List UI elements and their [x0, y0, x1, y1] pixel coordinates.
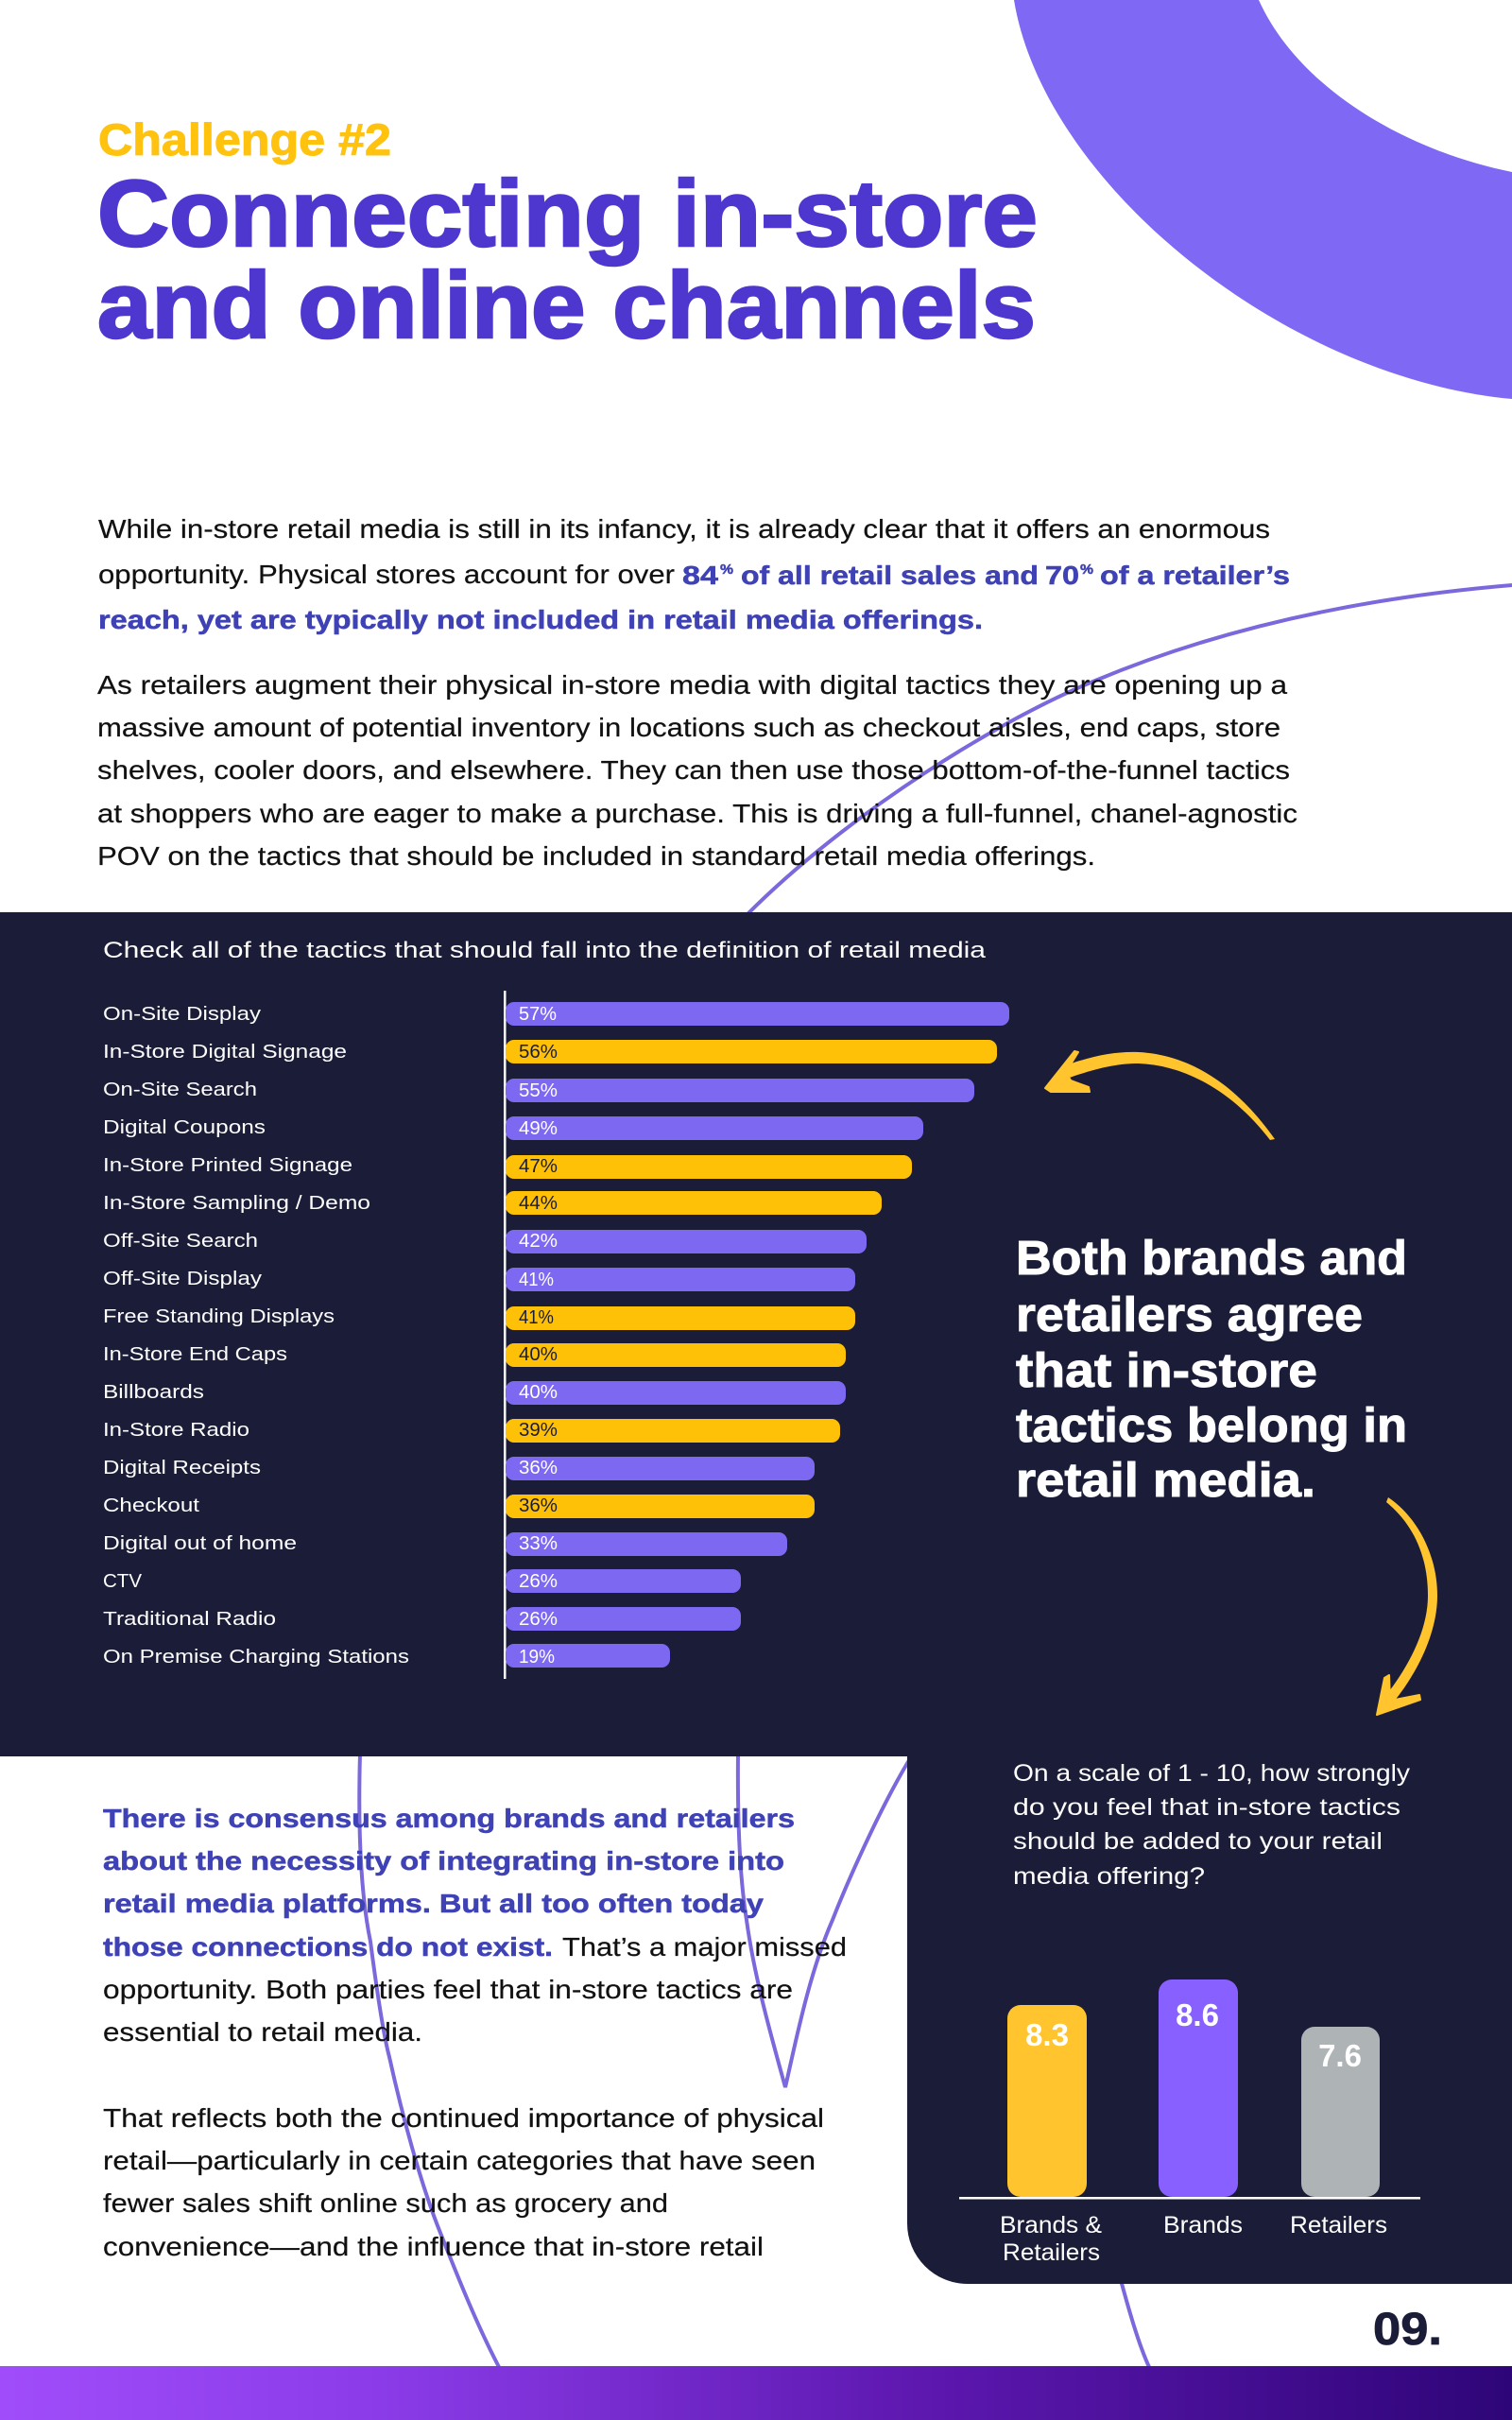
- text block: consensus: about the necessity of integrating in-store into: [103, 1846, 784, 1876]
- intro paragraph: opportunity. Physical stores account for over: [98, 560, 675, 589]
- row: Digital out of home: 33%: [519, 1533, 558, 1554]
- row: On-Site Display: On-Site Display: [103, 1003, 262, 1025]
- row: In-Store Digital Signage: [103, 1040, 997, 1063]
- category label: Retailers: Retailers: [1290, 2212, 1387, 2238]
- intro paragraph: of a retailer’s: [1100, 561, 1290, 590]
- row: On-Site Search: [103, 1079, 974, 1102]
- row: Free Standing Displays: [103, 1305, 855, 1330]
- bar chart: tactics: [103, 991, 1009, 1679]
- text block: consensus: retail—particularly in certain categories that have seen: [103, 2146, 816, 2175]
- bar: Retailers 7.6: 7.6: [1318, 2038, 1362, 2073]
- bar: Brands 8.6: [1159, 1979, 1238, 2197]
- row: In-Store Digital Signage: In-Store Digital Signage: [103, 1041, 347, 1063]
- row: Digital Coupons: 49%: [519, 1118, 558, 1139]
- row: Digital out of home: [103, 1532, 787, 1556]
- intro paragraph: 70: [1045, 561, 1079, 590]
- text block: consensus: essential to retail media.: [103, 2017, 422, 2047]
- text block: consensus: convenience—and the influence that in-store retail: [103, 2232, 764, 2261]
- survey question: On a scale of 1 - 10, how strongly: [1013, 1760, 1411, 1787]
- curved line lower left: [359, 1754, 499, 2367]
- intro paragraph: %: [1080, 562, 1093, 578]
- dark panel: chart background: [0, 912, 1512, 2284]
- row: On Premise Charging Stations: On Premise Charging Stations: [103, 1646, 409, 1668]
- row: Digital Receipts: Digital Receipts: [103, 1457, 261, 1478]
- category label: Brands & Retailers: [1000, 2212, 1102, 2266]
- row: Digital Receipts: 36%: [519, 1458, 558, 1478]
- text block: consensus: fewer sales shift online such as grocery and: [103, 2188, 668, 2218]
- row: Free Standing Displays: Free Standing Displays: [103, 1305, 335, 1327]
- row: In-Store End Caps: 40%: [519, 1344, 558, 1365]
- row: CTV: [103, 1569, 741, 1593]
- callout: both brands and retailers agree: Both brands and: [1016, 1231, 1407, 1285]
- eyebrow: Challenge #2: Challenge #2: [98, 114, 391, 164]
- row: CTV: CTV: [103, 1570, 142, 1592]
- category label: Brands & Retailers: Brands &: [1000, 2212, 1102, 2238]
- row: Off-Site Display: Off-Site Display: [103, 1268, 263, 1289]
- second paragraph: As retailers augment their physical in-store media with digital tactics they are opening up a: [97, 670, 1287, 700]
- row: In-Store Printed Signage: 47%: [519, 1156, 558, 1177]
- bar: Retailers 7.6: [1301, 2027, 1380, 2197]
- row: Checkout: Checkout: [103, 1495, 199, 1516]
- row: CTV: 26%: [519, 1571, 558, 1592]
- row: Off-Site Display: 41%: [519, 1270, 554, 1290]
- row: In-Store Radio: 39%: [519, 1420, 558, 1441]
- text block: consensus: [103, 1804, 847, 2261]
- row: Billboards: 40%: [519, 1382, 558, 1403]
- row: Traditional Radio: 26%: [519, 1609, 558, 1630]
- row: On Premise Charging Stations: [103, 1644, 670, 1668]
- row: In-Store Printed Signage: In-Store Printed Signage: [103, 1154, 352, 1176]
- bar chart: in-store scores: [959, 1979, 1420, 2266]
- intro paragraph: of all retail sales and: [741, 561, 1039, 590]
- row: In-Store Digital Signage: 56%: [519, 1042, 558, 1063]
- row: On-Site Display: 57%: [519, 1004, 557, 1025]
- bar: Brands & Retailers 8.3: [1007, 2005, 1087, 2197]
- bar: Brands 8.6: 8.6: [1176, 1997, 1219, 2032]
- row: In-Store Sampling / Demo: 44%: [519, 1193, 558, 1214]
- curved line below dark panel: [1121, 2280, 1149, 2367]
- bar: Brands & Retailers 8.3: 8.3: [1025, 2017, 1069, 2052]
- row: Digital Coupons: Digital Coupons: [103, 1116, 266, 1138]
- second paragraph: massive amount of potential inventory in locations such as checkout aisles, end caps, store: [97, 713, 1280, 742]
- decorative arc top right: [1014, 0, 1512, 399]
- row: In-Store Sampling / Demo: In-Store Sampling / Demo: [103, 1192, 370, 1214]
- title: and online channels: [97, 252, 1036, 357]
- row: Off-Site Search: [103, 1230, 867, 1253]
- intro paragraph: While in-store retail media is still in its infancy, it is already clear that it offers an enormous: [98, 514, 1270, 544]
- survey question: do you feel that in-store tactics: [1013, 1794, 1400, 1821]
- callout: both brands and retailers agree: that in-store: [1016, 1343, 1317, 1397]
- category label: Brands: Brands: [1163, 2212, 1243, 2238]
- row: Billboards: Billboards: [103, 1381, 204, 1403]
- row: On-Site Search: On-Site Search: [103, 1079, 257, 1100]
- row: Traditional Radio: Traditional Radio: [103, 1608, 276, 1630]
- row: In-Store End Caps: [103, 1343, 846, 1367]
- text block: consensus: That’s a major missed: [562, 1932, 847, 1962]
- row: Off-Site Search: Off-Site Search: [103, 1230, 258, 1252]
- callout: both brands and retailers agree: retailers agree: [1016, 1288, 1363, 1341]
- second paragraph: shelves, cooler doors, and elsewhere. They can then use those bottom-of-the-funnel tactics: [97, 755, 1290, 785]
- text block: consensus: There is consensus among brands and retailers: [103, 1804, 795, 1833]
- row: In-Store End Caps: In-Store End Caps: [103, 1343, 287, 1365]
- row: Checkout: 36%: [519, 1495, 558, 1516]
- row: In-Store Sampling / Demo: [103, 1191, 882, 1215]
- second paragraph: POV on the tactics that should be included in standard retail media offerings.: [97, 841, 1095, 871]
- intro paragraph: [98, 514, 1290, 634]
- title: Connecting in-store: [97, 161, 1038, 266]
- callout: both brands and retailers agree: [1016, 1231, 1407, 1507]
- v-shaped curved line: [738, 1754, 909, 2087]
- survey question: media offering?: [1013, 1863, 1205, 1890]
- survey question: [1013, 1760, 1411, 1890]
- row: On-Site Display: [103, 1002, 1009, 1026]
- category label: Brands & Retailers: Retailers: [1003, 2239, 1100, 2266]
- second paragraph: at shoppers who are eager to make a purchase. This is driving a full-funnel, chanel-agnostic: [97, 799, 1297, 828]
- row: Off-Site Search: 42%: [519, 1231, 558, 1252]
- intro paragraph: 84: [682, 561, 719, 590]
- row: Billboards: [103, 1381, 846, 1405]
- row: In-Store Printed Signage: [103, 1154, 912, 1179]
- row: Off-Site Display: [103, 1268, 855, 1291]
- second paragraph: [97, 670, 1297, 871]
- text block: consensus: That reflects both the continued importance of physical: [103, 2103, 824, 2133]
- arrow: pointing to chart: [1045, 1051, 1275, 1140]
- row: Digital out of home: Digital out of home: [103, 1532, 297, 1554]
- row: Traditional Radio: [103, 1607, 741, 1631]
- text block: consensus: those connections do not exist.: [103, 1932, 553, 1962]
- title: [97, 161, 1038, 357]
- chart title: Check all of the tactics that should fall into the definition of retail media: [103, 938, 987, 963]
- row: Free Standing Displays: 41%: [519, 1307, 554, 1328]
- intro paragraph: reach, yet are typically not included in retail media offerings.: [98, 605, 983, 634]
- callout: both brands and retailers agree: retail media.: [1016, 1453, 1315, 1507]
- row: Digital Coupons: [103, 1116, 923, 1140]
- text block: consensus: retail media platforms. But all too often today: [103, 1889, 764, 1918]
- row: In-Store Radio: In-Store Radio: [103, 1419, 249, 1441]
- callout: both brands and retailers agree: tactics belong in: [1016, 1398, 1407, 1452]
- survey question: should be added to your retail: [1013, 1828, 1383, 1855]
- arrow: pointing to score chart: [1377, 1497, 1437, 1715]
- row: In-Store Radio: [103, 1419, 840, 1443]
- intro paragraph: %: [720, 562, 733, 578]
- curved line behind intro text: [747, 585, 1512, 914]
- row: Checkout: [103, 1495, 815, 1518]
- row: On-Site Search: 55%: [519, 1080, 558, 1101]
- page number: 09.: [1373, 2305, 1442, 2355]
- footer gradient bar: [0, 2366, 1512, 2420]
- chart axis: [504, 991, 507, 1679]
- text block: consensus: opportunity. Both parties feel that in-store tactics are: [103, 1975, 793, 2004]
- row: Digital Receipts: [103, 1457, 815, 1480]
- row: On Premise Charging Stations: 19%: [519, 1647, 555, 1668]
- chart baseline: [959, 2197, 1420, 2199]
